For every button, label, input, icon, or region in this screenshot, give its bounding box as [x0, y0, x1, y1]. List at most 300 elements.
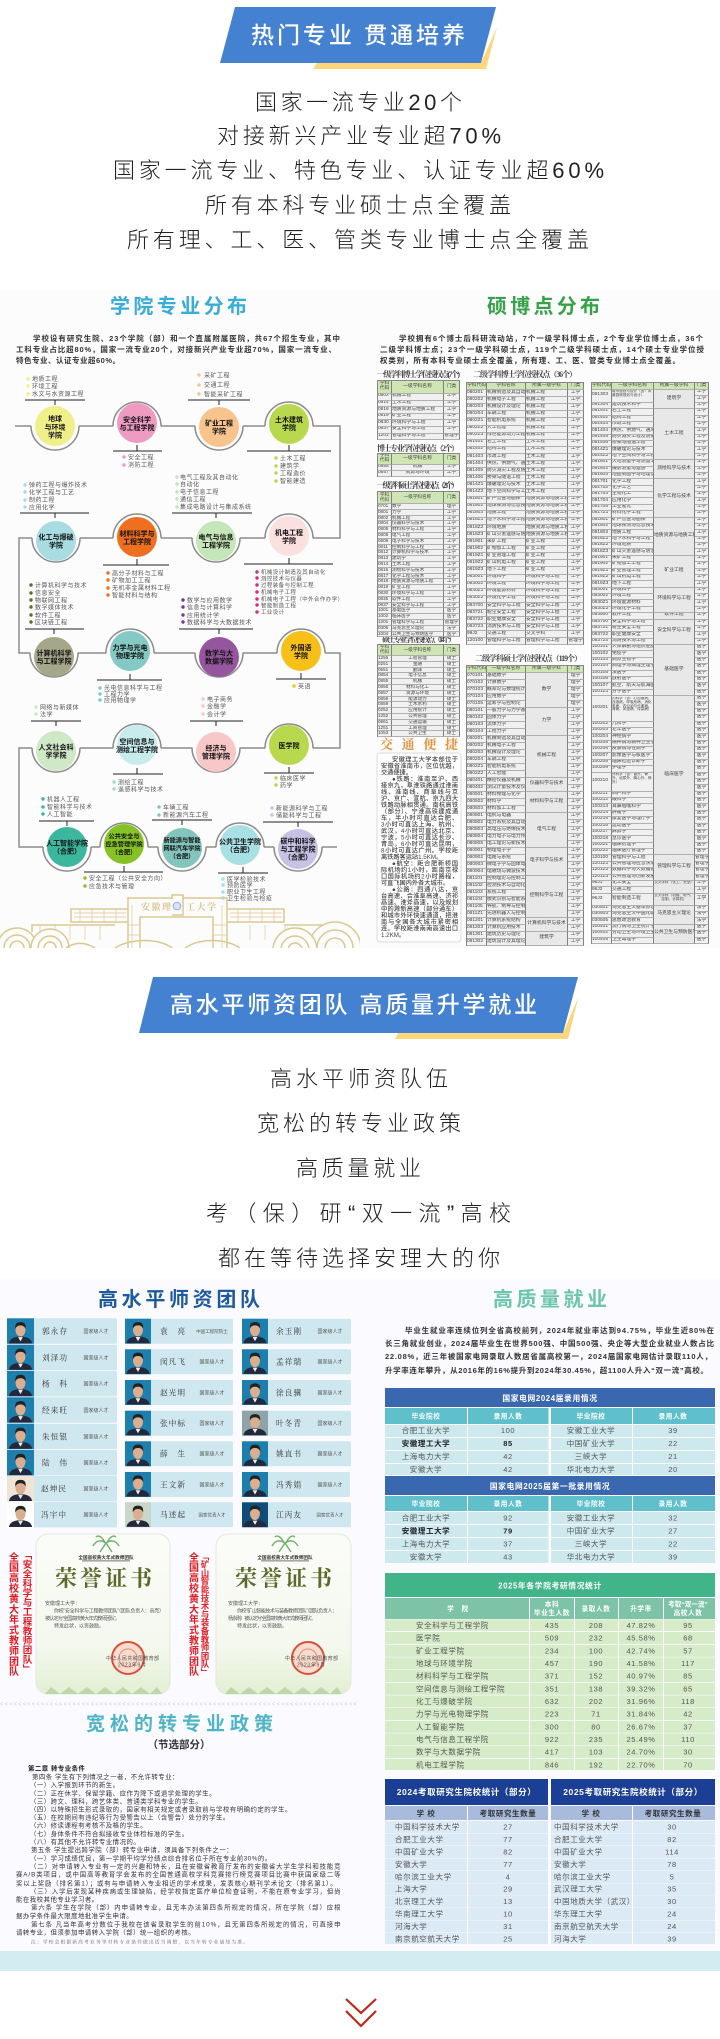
- college: chemical and blasting: [20, 481, 89, 565]
- certificate 1: 2023年9月: [118, 1662, 146, 1668]
- college: geomatics: 空间信息与: [120, 737, 154, 746]
- text block: faculty highlights: 宽松的转专业政策: [257, 1111, 461, 1136]
- table: 2025 graduate exam stats: 138: [589, 1684, 603, 1693]
- card: Feng Xiujuan: 国家级人才: [317, 1481, 343, 1488]
- table: 2025 graduate exam stats: 41.58%: [626, 1659, 656, 1668]
- table: 2025 graduate exam stats: 力学与光电物理学院: [416, 1709, 489, 1719]
- table: state grid 2025: 毕业院校: [412, 1499, 440, 1508]
- table: 2025 graduate exam stats: 232: [589, 1634, 603, 1643]
- table: 2025 graduate exam stats: 435: [545, 1621, 559, 1630]
- college: earth and environment: 环境工程: [32, 382, 58, 390]
- text block: transfer policy: 据办学条件最大限度地批准学生申请。: [16, 1911, 133, 1920]
- college: mechanical and electrical: 机电工程: [275, 528, 303, 537]
- table: 2025 graduate exam stats: 234: [545, 1646, 559, 1655]
- text block: transfer policy: （八）有其他不允许转专业情况的。: [30, 1837, 140, 1846]
- card: Yu Yugang: 国家级人才: [317, 1328, 343, 1335]
- card: Jiang Bingyou: [242, 1502, 351, 1527]
- table: 2025 graduate admissions: 35: [667, 1885, 677, 1894]
- text block: employment intro: 毕业生就业率连续位列全省高校前列，2024年就业率达到94.75%，毕业生近80%在: [405, 1325, 714, 1335]
- table: 2024 graduate admissions: 中国科学技术大学: [395, 1822, 460, 1832]
- certificate 2: [216, 1534, 351, 1694]
- table: 2025 graduate exam stats: 24.70%: [626, 1748, 656, 1757]
- table: 2025 graduate exam stats: 安全科学与工程学院: [416, 1620, 489, 1630]
- table: 2025 graduate exam stats: 空间信息与测绘工程学院: [416, 1683, 505, 1693]
- college: safety: 与工程学院: [120, 423, 154, 432]
- divider marks: <<<<<<<<<<<<<<<<<<<<<<<<<<<<<<<<<<<<<<<<<<<<<<<<<<<<<<<<<<<<<<<<<<<<<<<<<<<<<<<: [0, 1702, 357, 1708]
- college: geomatics: [112, 721, 164, 794]
- table: 2024 graduate admissions: 77: [503, 1835, 513, 1844]
- text block: transfer policy: 第五条 学生提出跨学院（部）转专业申请，须具备下列条件之一：: [31, 1845, 233, 1854]
- table: 2024 graduate admissions: 合肥工业大学: [395, 1834, 444, 1844]
- certificate 1: [36, 1534, 170, 1694]
- table: master second-level disciplines continued: 管理科学与工程: [657, 864, 691, 869]
- table: state grid 2025: 国家电网2025届第一批录用情况: [490, 1481, 610, 1491]
- card: Yao Zhishu: [242, 1441, 351, 1466]
- college: mechanics and optoelectronics: 工程力学: [104, 690, 130, 698]
- panel: transport info: 青岛，6小时可直达昆明，: [381, 840, 458, 848]
- table: 2025 graduate exam stats: 68: [683, 1634, 693, 1643]
- table: 2024 graduate admissions: 13: [503, 1897, 513, 1906]
- table: 2025 graduate exam stats: 材料科学与工程学院: [416, 1671, 489, 1681]
- college: artificial intelligence: 人工智能: [47, 810, 73, 818]
- card: Zhang Zhongbiao: 张中标: [160, 1418, 186, 1428]
- college: mining: [188, 372, 250, 451]
- table: state grid 2024: 100: [501, 1426, 515, 1435]
- table: master second-level disciplines: 机械工程: [537, 753, 556, 758]
- card: Yu Yugang: [242, 1319, 351, 1344]
- college: materials: [103, 513, 171, 600]
- table: 2025 graduate exam stats: 152: [589, 1672, 603, 1681]
- panel: transport info: 际机场约1小时，距南京禄: [381, 866, 459, 874]
- college: civil engineering: [247, 400, 331, 485]
- college: artificial intelligence: 智能科学与技术: [47, 803, 93, 811]
- table: 2025 graduate exam stats: 70: [683, 1760, 693, 1769]
- college: economics and management: 电子商务: [207, 696, 233, 704]
- card: Meng Xiangrui: [242, 1349, 351, 1374]
- college: public health: 职业卫生工程: [227, 888, 266, 896]
- college: carbon neutrality: [263, 804, 333, 873]
- card: Zhu Hengyin: 国家级人才: [83, 1433, 109, 1440]
- college: mechanics and optoelectronics: 力学与光电: [112, 643, 148, 652]
- table: master second-level disciplines continued: 马克思主义理论: [657, 911, 691, 916]
- college: public safety: （合肥）: [112, 848, 136, 856]
- certificate 1: 全国高校黄大年式教师团队: [78, 1554, 134, 1561]
- table: 2025 graduate exam stats: 25.49%: [626, 1735, 656, 1744]
- card: Jiang Bingyou: 国家优青人才: [316, 1512, 344, 1519]
- panel: transport info: 和城市外环快速通道，把淮: [381, 912, 458, 920]
- table: 2025 graduate exam stats: 学 院: [447, 1604, 469, 1613]
- table: master first-level disciplines: 一级学科名称: [404, 494, 431, 499]
- table: 2025 graduate exam stats: 地球与环境学院: [416, 1658, 473, 1668]
- table title: doctoral professional: 博士专业学位授权点（2个）: [377, 443, 459, 453]
- table: master first-level disciplines: 代码: [380, 496, 389, 502]
- text block: transfer policy: （一）入学报到环节的新生。: [30, 1780, 120, 1789]
- college: artificial intelligence: （合肥）: [53, 846, 81, 856]
- college: new energy vehicles: 网联汽车学院: [163, 844, 201, 852]
- text block: transfer policy: （一）学习成绩优良，第一学期平均学分绩点综合排名位于所在专业前30%的。: [30, 1853, 272, 1862]
- card: Xu Liangji: 徐良骥: [276, 1387, 302, 1397]
- college: earth and environment: 学院: [48, 430, 62, 440]
- table: master first-level disciplines: 门类: [447, 494, 456, 499]
- card: Xu Liangji: [242, 1380, 351, 1405]
- panel: transport info: 安徽理工大学本部位于: [392, 756, 458, 764]
- college: public health: 卫生检验与检疫: [227, 894, 273, 902]
- text block: college intro: 特色专业、认证专业超60%。: [16, 355, 120, 365]
- table: 2025 graduate exam stats: 95: [683, 1621, 693, 1630]
- college: chemical and blasting: 化工与爆破: [38, 532, 74, 542]
- illustration: campus building outline: [0, 894, 360, 948]
- college: artificial intelligence: 人工智能学院: [46, 838, 88, 848]
- table: master second-level disciplines continued: 081303: [592, 392, 608, 397]
- table: 2025 graduate exam stats: 2025年各学院考研情况统计: [498, 1580, 602, 1590]
- college: mechanical and electrical: [244, 512, 343, 616]
- table: master second-level disciplines continued: 基础医学: [664, 667, 684, 672]
- table: state grid 2024: 安徽工业大学: [567, 1425, 615, 1435]
- college: public safety: 应急技术与管理: [89, 882, 135, 890]
- college: materials: 矿物加工工程: [112, 576, 151, 584]
- college: electrical and information: 电气与信息: [198, 532, 234, 542]
- table: 2025 graduate exam stats: [385, 1573, 715, 1770]
- table: master professional degrees: 一级学科名称: [404, 647, 431, 652]
- college: carbon neutrality: 新能源科学与工程: [276, 804, 328, 812]
- table: 2025 graduate exam stats: 300: [545, 1722, 559, 1731]
- college: mechanical and electrical: 机械电子工程: [261, 588, 296, 596]
- heading: high quality employment: 高质量就业: [493, 1287, 607, 1311]
- table: 2025 graduate admissions: 82: [667, 1835, 677, 1844]
- text block: faculty highlights: 都在等待选择安理大的你: [218, 1246, 500, 1271]
- card: Zhang Zhongbiao: 国家级人才: [199, 1420, 225, 1427]
- sub-heading: excerpt: （节选部分）: [148, 1738, 210, 1751]
- card: Zhao Kunmin: [7, 1476, 117, 1502]
- college: computer science: [25, 582, 87, 681]
- college: civil engineering: 土木建筑: [275, 415, 303, 424]
- text block: degree intro: 二级学科博士点；23个一级学科硕士点，119个二级学科硕士点，14个硕士专业学位授: [380, 344, 704, 354]
- college: chemical and blasting: 弹药工程与爆炸技术: [29, 481, 88, 489]
- text block: college intro: [16, 333, 340, 365]
- table: master second-level disciplines continued: 测绘科学与技术: [657, 466, 691, 471]
- certificate 1: 荣誉证书: [55, 1566, 155, 1591]
- college: economics and management: 管理学院: [202, 752, 230, 760]
- table: 2025 graduate exam stats: 71: [591, 1710, 601, 1719]
- table: master second-level disciplines continued: 矿业工程: [664, 568, 684, 573]
- table: state grid 2025: 92: [503, 1514, 513, 1522]
- table: 2025 graduate admissions: 中国科学技术大学: [554, 1822, 619, 1832]
- table: 2025 graduate exam stats: 37: [683, 1722, 693, 1731]
- college: humanities and social sciences: 人文社会科: [38, 742, 74, 752]
- table: master second-level disciplines: 数学: [542, 687, 551, 692]
- table: state grid 2024: 安徽理工大学: [402, 1438, 450, 1448]
- college: earth and environment: 地质工程: [32, 375, 58, 383]
- college: civil engineering: 土木工程: [280, 454, 306, 462]
- college: materials: 智能材料与结构: [112, 592, 158, 600]
- college: computer science: 信息安全: [35, 589, 61, 597]
- table: state grid 2025: 32: [668, 1514, 678, 1522]
- building sign: 工大学: [186, 901, 218, 912]
- panel: transport info: 交通便捷。: [381, 768, 412, 776]
- table: 2025 graduate exam stats: 351: [545, 1684, 559, 1693]
- college: public health: [216, 821, 273, 902]
- college: mechanical and electrical: 机械电子工程（中外合作办学）: [261, 595, 343, 603]
- table: 2025 graduate exam stats: 202: [589, 1697, 603, 1706]
- panel: transport info: 宁波，5小时可直达长沙、: [381, 834, 458, 842]
- table: state grid 2025: 43: [503, 1552, 513, 1562]
- table: master second-level disciplines continued: 100201: [592, 705, 608, 710]
- table: doctoral professional degrees: [377, 453, 460, 477]
- college: artificial intelligence: [39, 796, 94, 871]
- text block: transfer policy: （三）入学后发现某种疾病或生理缺陷，经学校指定医疗单位检查证明，不能在原专业学习，但尚: [30, 1887, 341, 1896]
- table: master second-level disciplines: [466, 665, 584, 946]
- college: humanities and social sciences: 法学: [40, 710, 53, 718]
- card: Yang Ke: 杨 科: [42, 1379, 68, 1389]
- table: 2024 graduate admissions: [385, 1779, 548, 1944]
- vertical label: teaching team award 2: 全国高校黄大年式教师团队: [186, 1551, 198, 1677]
- college: computer science: 区块链工程: [35, 618, 68, 626]
- table: 2025 graduate exam stats: 30: [683, 1748, 693, 1757]
- college: mining: 学院: [212, 426, 226, 436]
- card: Feng Yuzhong: 国家级人才: [83, 1512, 109, 1519]
- table: 2025 graduate admissions: 河海大学: [554, 1934, 586, 1944]
- text block: employment intro: [385, 1325, 714, 1375]
- table: 2025 graduate admissions: [551, 1779, 715, 1944]
- panel: transport info: 铁路动脉相贯通。南杭高铁: [381, 801, 459, 809]
- college: materials: 材料科学与: [120, 529, 154, 538]
- college: civil engineering: 学院: [282, 423, 296, 432]
- table title: master second-level: 二级学科硕士学位授权点（119个）: [475, 653, 582, 663]
- table: 2025 graduate exam stats: 电气与信息工程学院: [416, 1734, 489, 1744]
- college: geomatics: 测绘工程: [118, 778, 144, 786]
- table: state grid 2024: 22: [668, 1439, 678, 1448]
- text block: major highlights: 所有理、工、医、管类专业博士点全覆盖: [127, 228, 589, 253]
- table: doctoral first-level disciplines: 学科: [380, 381, 389, 386]
- college: medicine: 临床医学: [280, 774, 306, 782]
- table: master professional degrees: 代码: [380, 649, 389, 654]
- table: 2025 graduate exam stats: 考取“双一流”: [668, 1600, 708, 1608]
- certificate 1: 中华人民共和国教育部: [106, 1655, 159, 1662]
- card: Zhao Kunmin: 国家级人才: [83, 1486, 109, 1493]
- panel: transport info: 车，半小时可直达合肥、: [381, 814, 458, 822]
- panel: transport info: ●航空：距合肥新桥国: [392, 860, 458, 868]
- card: Ma Shuqi: 国家优青人才: [198, 1512, 226, 1519]
- college: public safety: 应急管理学院: [105, 840, 143, 848]
- college: mathematics and big data: 数据学院: [205, 656, 233, 666]
- table: state grid 2024: 39: [668, 1426, 678, 1435]
- card: Feng Xiujuan: [242, 1472, 350, 1497]
- card: Yao Zhishu: 姚直书: [276, 1449, 302, 1459]
- table: state grid 2024: 21: [668, 1452, 678, 1461]
- college: mechanical and electrical: 智能制造工程: [261, 602, 296, 610]
- card: Guo Yongcun: 国家级人才: [83, 1328, 109, 1335]
- college: chemical and blasting: 化学工程与工艺: [29, 488, 75, 496]
- panel: transport info: 1.2KM。: [381, 932, 405, 939]
- table: master second-level disciplines: 力学: [542, 718, 551, 723]
- vertical label: mining team: 「矿山智能技术与装备教师团队」: [200, 1552, 210, 1676]
- text block: college intro: 工科专业占比超80%，国家一流专业20个，对接新兴产业专业超70%，国家一流专业、: [16, 344, 336, 354]
- table: state grid 2025: 安徽理工大学: [402, 1526, 450, 1536]
- table: master second-level disciplines continued: 安全科学与工程: [657, 628, 691, 633]
- college: electrical and information: 电气工程及其自动化: [180, 474, 239, 482]
- banner: hot majors: 热门专业 贯通培养: [251, 22, 465, 48]
- table: state grid 2025: 安徽大学: [410, 1552, 442, 1562]
- table: 2024 graduate admissions: 河海大学: [395, 1921, 427, 1931]
- college: new energy vehicles: （合肥）: [170, 852, 194, 860]
- table: 2025 graduate admissions: 2025考取研究生院校统计（部分）: [563, 1787, 703, 1797]
- table: 2025 graduate exam stats: 39.32%: [626, 1684, 656, 1693]
- text block: major highlights: 对接新兴产业专业超70%: [217, 123, 501, 148]
- college: public health: 医学检验技术: [227, 876, 266, 884]
- college: new energy vehicles: 新能源与智能: [163, 836, 201, 844]
- panel: transport info: 高速、淮斧高速，以及规划: [381, 898, 458, 906]
- college: civil engineering: 建筑学: [280, 462, 300, 470]
- banner: hot majors: [220, 7, 497, 69]
- table: state grid 2025: 录用人数: [659, 1499, 687, 1508]
- certificate 2: 你校“矿山智能技术与装备教师团队”（团队负责人：: [237, 1608, 337, 1614]
- card: Jing Laiwang: 国家级人才: [83, 1407, 109, 1414]
- college: computer science: 计算机科学: [36, 648, 72, 658]
- college: foreign languages: [276, 627, 326, 690]
- table: state grid 2025: 安徽工业大学: [567, 1512, 615, 1522]
- table: doctoral first-level disciplines: [377, 380, 460, 440]
- college: materials: 高分子材料与工程: [112, 570, 164, 578]
- card: Zhang Zhongbiao: [125, 1411, 233, 1436]
- table: 2024 graduate admissions: 中国矿业大学: [395, 1847, 444, 1857]
- college: economics and management: 金融学: [207, 702, 227, 710]
- college: earth and environment: 与环境: [44, 422, 66, 432]
- table: 2024 graduate admissions: 哈尔滨工业大学: [395, 1872, 452, 1882]
- college: medicine: 药学: [280, 782, 293, 790]
- college: materials: 工程学院: [123, 537, 151, 546]
- college: mining: 智能采矿工程: [204, 390, 243, 398]
- table: 2025 graduate exam stats: 100: [589, 1646, 603, 1655]
- table: doctoral first-level disciplines: 一级学科名称: [403, 384, 432, 389]
- text block: major highlights: 国家一流专业20个: [255, 90, 462, 115]
- card: Min Fanfei: [125, 1349, 233, 1374]
- table: state grid 2024: 国家电网2024届录用情况: [502, 1393, 598, 1403]
- table: state grid 2025: 中国矿业大学: [567, 1526, 615, 1536]
- card: Zhao Guangming: 国家级人才: [199, 1389, 225, 1396]
- table: 2024 graduate admissions: 南京航空航天大学: [395, 1934, 460, 1944]
- table: master second-level disciplines: 建筑学: [539, 935, 554, 940]
- table: 2025 graduate exam stats: 223: [545, 1710, 559, 1719]
- card: Jiang Bingyou: 江丙友: [276, 1510, 302, 1520]
- panel: transport info: 台高速、合淮阜高速、济祁: [381, 892, 458, 900]
- text block: faculty highlights: 考（保）研“双一流”高校: [206, 1201, 511, 1226]
- college: computer science: 软件工程: [35, 612, 61, 620]
- college: safety: [113, 399, 162, 469]
- card: Yao Zhishu: 国家级人才: [317, 1451, 343, 1458]
- card: Feng Xiujuan: 冯秀娟: [276, 1479, 302, 1489]
- college: mechanical and electrical: 过程装备与控制工程: [261, 581, 314, 589]
- college: public health: 预防医学: [227, 882, 253, 890]
- table: 2025 graduate exam stats: 31.96%: [626, 1697, 656, 1706]
- college: safety: 消防工程: [128, 461, 154, 469]
- card: Xue Sheng: 国家级人才: [199, 1451, 225, 1458]
- college: earth and environment: 水文与水资源工程: [32, 390, 84, 398]
- card: Lu Wei: 国家级人才: [83, 1460, 109, 1467]
- table: state grid 2024: 华北电力大学: [567, 1464, 615, 1474]
- table: state grid 2025: [385, 1476, 715, 1563]
- college: carbon neutrality: 储能科学与工程: [276, 812, 322, 820]
- heading: degree programs: 硕博点分布: [487, 295, 600, 318]
- text block: transfer policy: （五）在校期间有违纪等行为受警告以上（含警告）处分的学生。: [30, 1812, 230, 1822]
- certificate 1: 你校“安全科学与工程教师团队”（团队负责人：袁亮）: [54, 1608, 164, 1614]
- footer band: [0, 1951, 720, 1971]
- college: chemical and blasting: 学院: [49, 540, 63, 550]
- college: electrical and information: 电子信息工程: [180, 488, 219, 496]
- text block: employment intro: 升学率连年攀升，从2016年的16%提升到2024年30.45%，超1100人升入“双一流”高校。: [385, 1365, 708, 1375]
- text block: degree intro: [380, 333, 704, 365]
- table: 2025 graduate exam stats: 371: [545, 1672, 559, 1681]
- certificate 2: 安徽理工大学：: [228, 1600, 263, 1607]
- college: public health: 公共卫生学院: [219, 837, 261, 846]
- table title: master first-level: 一级学科硕士学位授权点（23个）: [377, 480, 459, 490]
- table: 2025 graduate exam stats: 40.97%: [626, 1672, 656, 1681]
- text block: major highlights: 国家一流专业、特色专业、认证专业超60%: [113, 158, 604, 183]
- card: Feng Yuzhong: [7, 1502, 117, 1528]
- table: 2025 graduate exam stats: 417: [545, 1748, 559, 1757]
- table: 2025 graduate exam stats: 457: [545, 1659, 559, 1668]
- text block: transfer policy: 第七条 凡当年高考分数位于我校在该省录取学生的前10%，且无第四条所规定的情况，可直接申: [31, 1919, 341, 1928]
- table: master second-level disciplines continued: 工学: [697, 896, 706, 901]
- text block: employment intro: 22.08%，近三年被国家电网录取人数居省属高校第一，2024届国家电网估计录取110人，: [385, 1351, 712, 1361]
- table: master second-level disciplines continued: 建筑学: [667, 396, 681, 401]
- panel: transport info: 离铁路客运站1.5KM。: [381, 853, 442, 861]
- table: 2024 graduate admissions: 25: [503, 1934, 513, 1944]
- panel background: majors and degrees: [0, 290, 720, 948]
- table: master second-level disciplines: 电气工程: [537, 827, 556, 832]
- table: state grid 2024: 三峡大学: [575, 1451, 607, 1461]
- table: 2025 graduate exam stats: 235: [589, 1735, 603, 1744]
- college: public safety: 公共安全与: [109, 832, 139, 840]
- text block: major highlights: [113, 90, 604, 253]
- panel: transport info: 中的滁新高速（部分通车）: [381, 905, 458, 913]
- card: Liu Zegong: 国家级人才: [83, 1354, 109, 1361]
- table: doctoral first-level disciplines: 代码: [380, 386, 389, 391]
- text block: faculty highlights: 高质量就业: [296, 1156, 421, 1181]
- table: 2025 graduate exam stats: 化工与爆破学院: [416, 1696, 473, 1706]
- college: safety: 安全科学: [123, 415, 151, 424]
- table: 2025 graduate exam stats: 103: [589, 1748, 603, 1757]
- text block: transfer policy: 赛A/B类项目，或中国高等教育学会发布的全国普通高校学科竞赛排行榜竞赛项目比赛中获国家级二等: [16, 1869, 341, 1878]
- table: 2025 graduate exam stats: 632: [545, 1697, 559, 1706]
- card: Yu Yugang: 余玉刚: [276, 1326, 302, 1336]
- table: 2024 graduate admissions: 10: [503, 1910, 513, 1919]
- college: new energy vehicles: 车辆工程: [163, 804, 189, 812]
- text block: transfer policy: （四）以特殊招生形式录取的，国家有相关规定或者录取前与学校有明确约定的学生。: [30, 1804, 292, 1814]
- table: 2025 graduate admissions: 考取研究生数量: [645, 1808, 701, 1818]
- card: Meng Xiangrui: 国家级人才: [317, 1359, 343, 1366]
- college: mathematics and big data: 应用统计学: [187, 612, 220, 620]
- table: 2025 graduate admissions: 5: [670, 1872, 674, 1882]
- table: 2025 graduate exam stats: 矿业工程学院: [416, 1645, 465, 1655]
- table: master second-level disciplines: 仪器科学与技术: [530, 781, 563, 786]
- table: master second-level disciplines continued: 临床医学: [664, 772, 684, 777]
- college: carbon neutrality: （合肥）: [284, 852, 312, 862]
- table: 2025 graduate admissions: 学 校: [582, 1808, 600, 1818]
- card: Liu Zegong: 刘泽功: [42, 1352, 68, 1362]
- college: mechanics and optoelectronics: 光电信息科学与工程: [104, 684, 163, 692]
- college: medicine: [264, 721, 314, 790]
- table: doctoral professional degrees: 一级学科名称: [403, 456, 432, 461]
- card: Yang Ke: 国家级人才: [83, 1381, 109, 1388]
- panel: transport info: [377, 753, 461, 942]
- college: foreign languages: 英语: [298, 682, 311, 690]
- text block: transfer policy: （三）跨文、理科，跨艺体类、普通类学科专业的学生。: [30, 1796, 202, 1805]
- table: 2025 graduate exam stats: 机电工程学院: [416, 1759, 465, 1769]
- certificate 2: 2023年9月: [297, 1662, 325, 1668]
- table: state grid 2024: 20: [668, 1465, 678, 1474]
- college: computer science: 计算机科学与技术: [35, 582, 87, 590]
- card: Ma Shuqi: [125, 1502, 233, 1527]
